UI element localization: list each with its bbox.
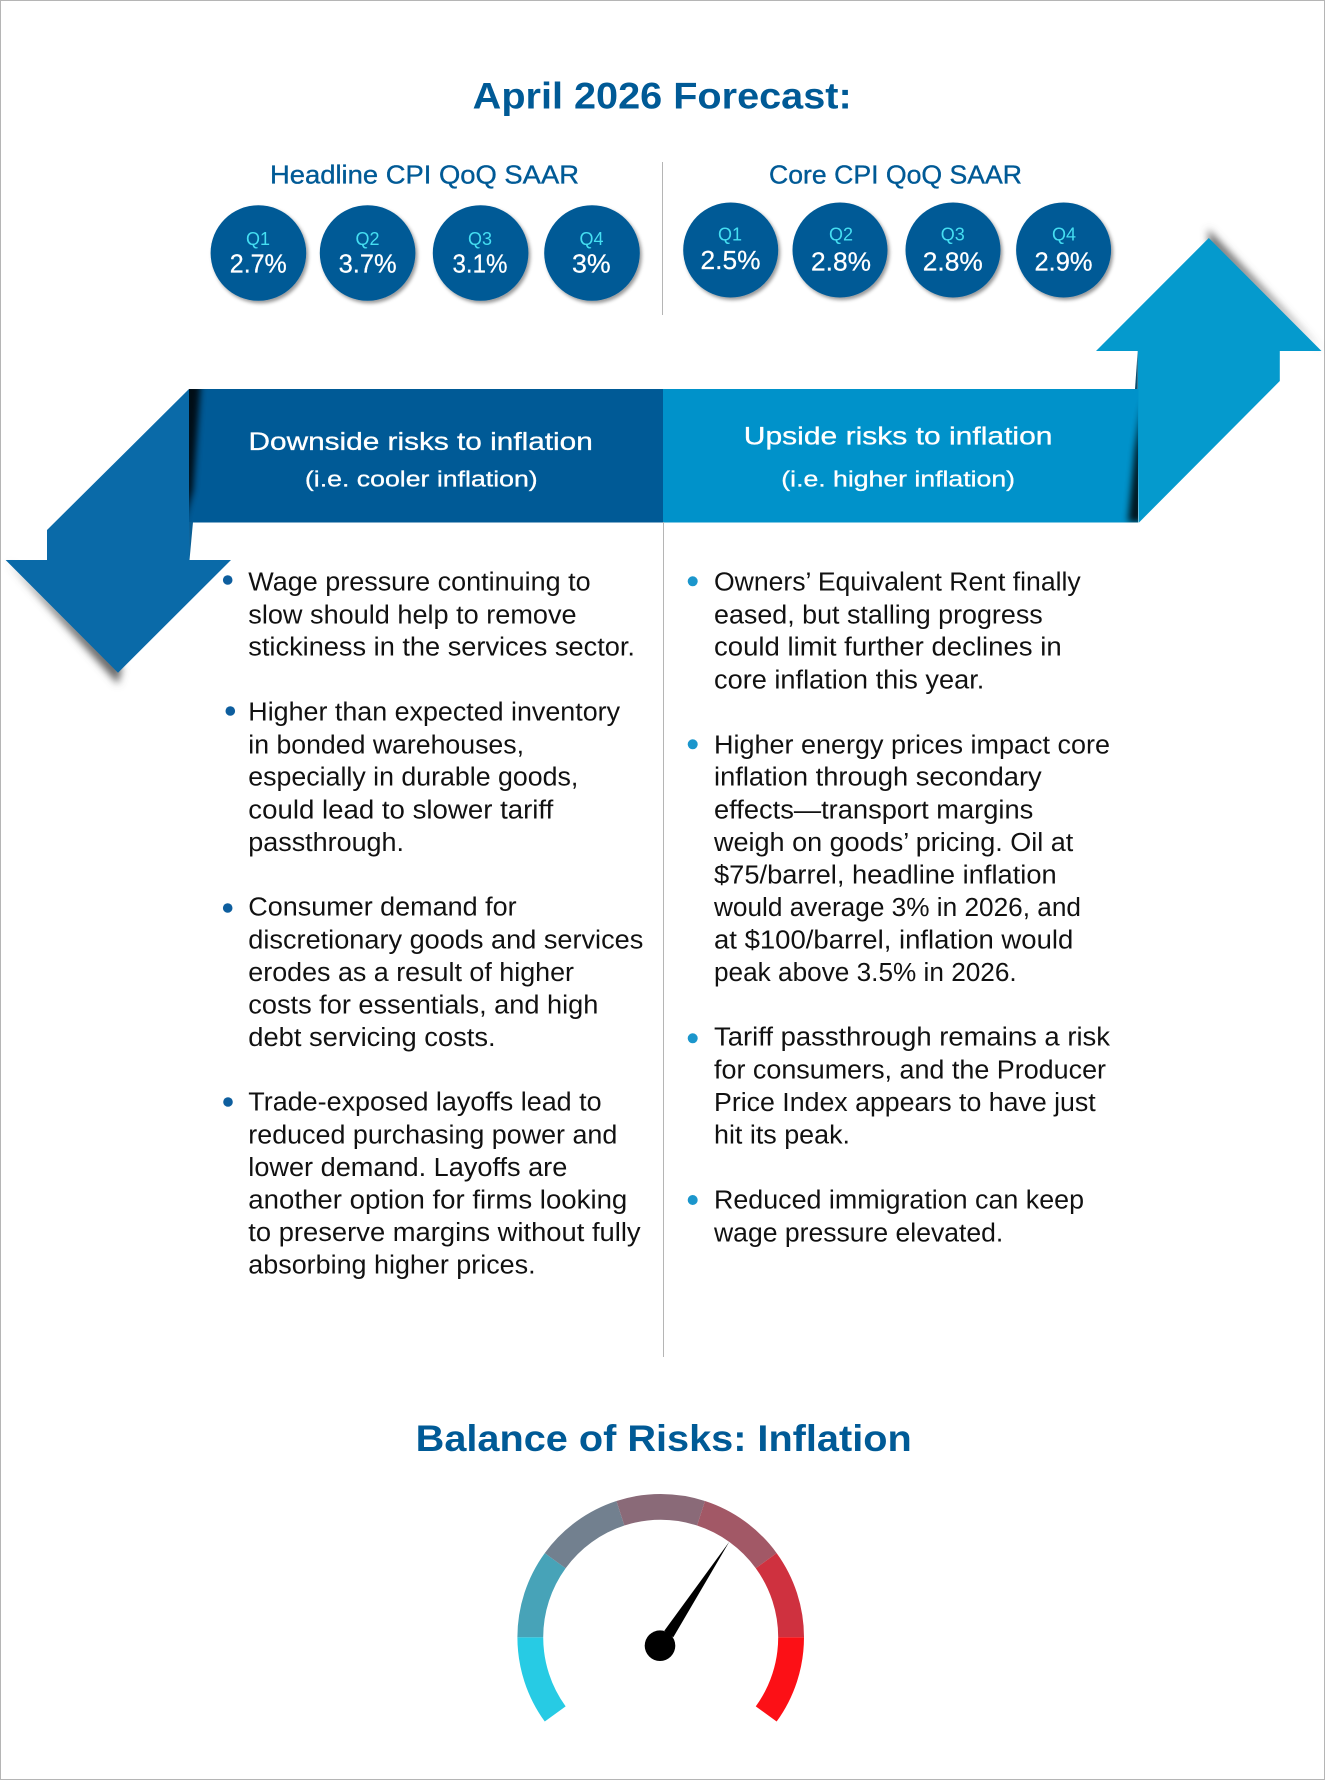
title: April 2026 Forecast: (473, 75, 852, 116)
panel: core CPI forecast (683, 159, 1111, 298)
bullet: inventory (226, 699, 620, 857)
banner subheading: downside: (i.e. cooler inflation) (305, 467, 538, 492)
badge: core Q3: Q3 (941, 225, 965, 245)
badge: headline Q4: 3% (572, 249, 611, 279)
bullet: consumer demand: debt servicing costs. (248, 1024, 496, 1052)
bullet: consumer demand: Consumer demand for (248, 894, 517, 922)
bullet: owners equivalent rent: core inflation this year. (714, 666, 984, 694)
badge: headline Q3: Q3 (468, 229, 492, 249)
bullet: wage pressure: slow should help to remove (248, 601, 577, 629)
badge: headline Q1: 2.7% (230, 249, 287, 279)
badge: headline Q4: Q4 (579, 229, 604, 249)
bullet: layoffs: another option for firms looking (248, 1186, 627, 1214)
bullet: owners equivalent rent (688, 569, 1081, 694)
bullet: inventory: passthrough. (248, 829, 404, 857)
bullet: energy prices: effects—transport margins (714, 796, 1033, 824)
bullet: energy prices: would average 3% in 2026, and (713, 894, 1081, 922)
bullet: tariff passthrough: Tariff passthrough remains a risk (714, 1024, 1110, 1052)
bullet: consumer demand: costs for essentials, and high (248, 992, 598, 1020)
bullet: consumer demand: erodes as a result of higher (248, 959, 575, 987)
bullet: energy prices: weigh on goods’ pricing. Oil at (713, 829, 1073, 857)
bullet: inventory: Higher than expected inventory (248, 699, 620, 727)
panel: upside risk list (688, 569, 1110, 1247)
bullet: tariff passthrough (688, 1024, 1110, 1150)
badge: headline Q1: Q1 (246, 229, 270, 249)
bullet: energy prices: $75/barrel, headline inflation (714, 862, 1057, 890)
bullet: layoffs: absorbing higher prices. (248, 1252, 536, 1280)
bullet: consumer demand (223, 894, 643, 1052)
badge: headline Q4 (544, 205, 640, 301)
badge: headline Q2: Q2 (355, 229, 380, 249)
heading: headline CPI: Headline CPI QoQ SAAR (270, 159, 579, 189)
badge: core Q3 (906, 202, 1000, 298)
bullet: layoffs: Trade-exposed layoffs lead to (248, 1089, 602, 1117)
banner: downside risks (183, 380, 664, 560)
arrow: upside risk pointing up (1096, 229, 1322, 522)
banner heading: upside: Upside risks to inflation (744, 422, 1052, 450)
badge: headline Q3 (433, 205, 528, 301)
heading: core CPI: Core CPI QoQ SAAR (769, 159, 1022, 189)
bullet: inventory: especially in durable goods, (248, 764, 578, 792)
badge: core Q4 (1016, 202, 1111, 298)
bullet: energy prices: at $100/barrel, inflation would (714, 927, 1073, 955)
bullet: owners equivalent rent: could limit further declines in (714, 634, 1062, 662)
panel: headline CPI forecast (211, 159, 640, 301)
badge: core Q1: 2.5% (700, 245, 760, 275)
badge: core Q2: Q2 (829, 225, 853, 245)
bullet: energy prices (688, 731, 1110, 987)
badge: headline Q1 (211, 205, 306, 301)
bullet: tariff passthrough: Price Index appears to have just (714, 1089, 1096, 1117)
bullet: wage pressure (223, 569, 635, 662)
badge: core Q2 (792, 202, 888, 298)
bullet: reduced immigration: wage pressure elevated. (713, 1219, 1003, 1247)
bullet: wage pressure: stickiness in the services sector. (248, 634, 635, 662)
bullet: layoffs: to preserve margins without fully (248, 1219, 641, 1247)
bullet: energy prices: inflation through secondary (714, 764, 1042, 792)
bullet: layoffs (223, 1089, 641, 1280)
bullet: layoffs: reduced purchasing power and (248, 1121, 617, 1149)
banner heading: downside: Downside risks to inflation (248, 428, 593, 456)
panel: downside risk list (223, 569, 643, 1280)
bullet: tariff passthrough: hit its peak. (714, 1122, 850, 1150)
badge: headline Q2 (320, 205, 415, 301)
bullet: inventory: in bonded warehouses, (248, 731, 524, 759)
badge: headline Q3: 3.1% (452, 249, 508, 279)
arrow: downside risk pointing down (6, 389, 231, 684)
badge: core Q3: 2.8% (923, 247, 983, 277)
badge: headline Q2: 3.7% (339, 249, 397, 279)
badge: core Q1 (683, 202, 778, 298)
bullet: owners equivalent rent: Owners’ Equivalent Rent finally (714, 569, 1081, 597)
heading: balance of risks: Balance of Risks: Inflation (416, 1418, 912, 1459)
gauge needle (645, 1542, 729, 1661)
bullet: inventory: could lead to slower tariff (248, 796, 554, 824)
bullet: consumer demand: discretionary goods and services (248, 926, 643, 954)
badge: core Q1: Q1 (718, 225, 742, 245)
bullet: tariff passthrough: for consumers, and the Producer (714, 1056, 1107, 1084)
bullet: wage pressure: Wage pressure continuing to (248, 569, 591, 597)
bullet: layoffs: lower demand. Layoffs are (248, 1154, 567, 1182)
bullet: energy prices: peak above 3.5% in 2026. (714, 959, 1017, 987)
gauge: balance of risks (517, 1494, 804, 1722)
banner subheading: upside: (i.e. higher inflation) (781, 467, 1015, 492)
bullet: energy prices: Higher energy prices impact core (714, 731, 1110, 759)
bullet: reduced immigration (688, 1187, 1084, 1247)
banner: upside risks (663, 351, 1143, 522)
badge: core Q4: Q4 (1052, 225, 1076, 245)
bullet: reduced immigration: Reduced immigration can keep (714, 1187, 1084, 1215)
badge: core Q2: 2.8% (811, 247, 871, 277)
bullet: owners equivalent rent: eased, but stalling progress (714, 601, 1043, 629)
badge: core Q4: 2.9% (1034, 247, 1092, 277)
